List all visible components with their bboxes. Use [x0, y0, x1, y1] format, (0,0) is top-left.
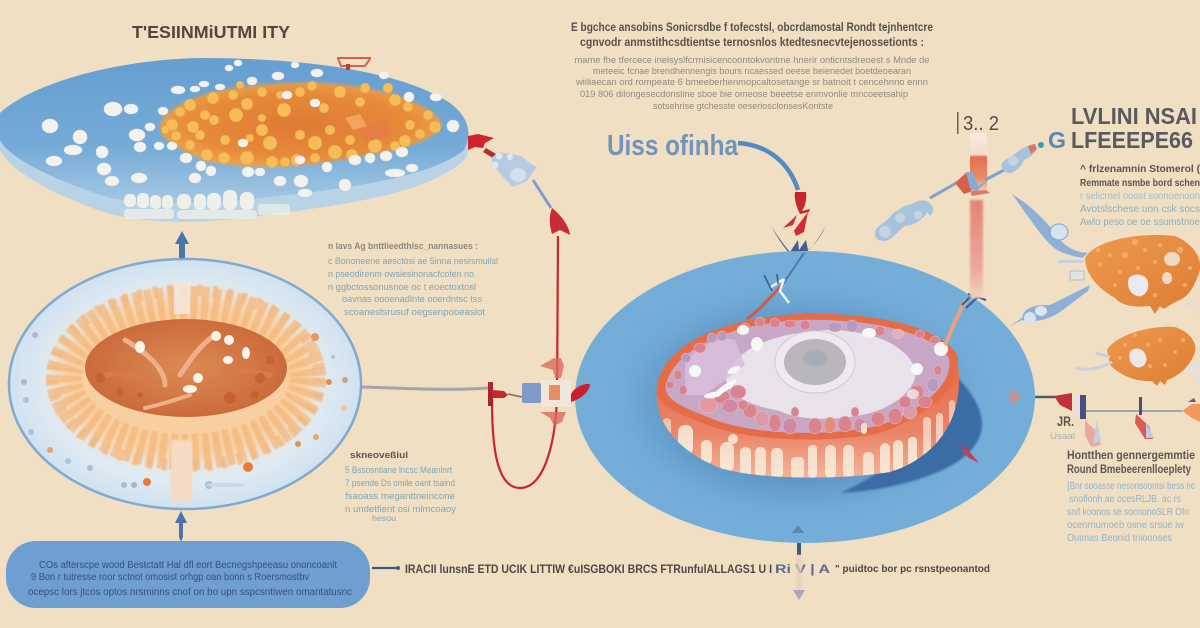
text block: top description: 019 806 dilongesecdonsline sboe bie omeose beeetse enmvonlie mncoeetsahip	[580, 89, 908, 99]
pill text: COs afterscpe wood Bestctatt Hal dfl eort Becnegshpeeasu ononcoanlt	[39, 560, 337, 571]
text block: top description: mame fhe tfercece ineisyslfcrmisicencoontokvontme hnerir onticntsdreoest s Mnde de	[574, 55, 930, 65]
panel: left lower cell diagram	[9, 259, 361, 509]
orange cell cluster	[160, 81, 441, 168]
nerve chain: centre	[875, 142, 1044, 241]
nerve: lower right	[1008, 285, 1090, 327]
pill text	[28, 560, 352, 598]
text block: lower left notes: hesou	[372, 514, 396, 523]
text block: top description: wiiliaecan ord rompeate 6 bmeeberhenmopcaltosetange sr batnoit t cencehnno ennn	[575, 77, 928, 87]
text block: top description: cgnvodr anmstithcsdtientse ternosnlos ktedtesnecvtejenossetionts :	[580, 37, 924, 49]
heading: right panel	[1048, 103, 1197, 153]
text block: top description: sotsehrise gtchesste oeseriosclonsesKontste	[653, 101, 833, 111]
connector: pill to caption	[372, 566, 400, 570]
title: T'ESIINMiUTMI ITY	[132, 22, 290, 42]
illustration: lower orange tissue	[1076, 327, 1200, 386]
illustration: upper orange tissue	[1085, 235, 1200, 314]
text block: lower left notes: n undetfient osi mlmcoaoy	[345, 504, 456, 515]
text block: upper left notes: scoanestsrusuf oegsenpooeaslot	[344, 307, 485, 318]
teeth	[663, 400, 955, 479]
pill text: 9 Bon r tutresse roor sctnot omosist orhgp oan bonn s Roersmostbv	[31, 572, 309, 583]
arrow: plate to valve	[468, 134, 570, 235]
nerve: upper right	[1012, 194, 1088, 280]
white cells	[42, 60, 459, 197]
text block: right top notes	[1080, 164, 1200, 228]
panel: centre cell diagram	[575, 251, 1035, 543]
text block: upper left notes: oavnas oooenadlnte ooerdntsc tss	[342, 294, 482, 305]
text block: upper left notes: c Bononeene aesctosi ae 5inna nesrsmuilsl	[328, 256, 498, 267]
icon: valve	[488, 358, 590, 426]
heading: right panel: LVLINI NSAI	[1071, 103, 1197, 129]
orange rim	[657, 314, 958, 440]
pill text: ocepsc lors jtcos optos nrsminns cnof on bo upn sspcsntiwen omantatusnc	[28, 587, 352, 598]
nucleus folds	[105, 335, 270, 408]
central white mass	[726, 330, 916, 419]
outer particles	[21, 332, 348, 489]
text block: right top notes: Avotslschese uon csk socs	[1080, 204, 1200, 215]
heading: centre label: Uiss ofinha	[607, 130, 739, 162]
disc shading	[620, 285, 980, 509]
text block: right bottom notes: ocenrnumoeb osne srsue iw	[1067, 519, 1184, 531]
cell shadow	[840, 375, 982, 493]
label: small value: JR.	[1057, 413, 1074, 429]
text block: right bottom notes: snoflonh ae ocesRLJB. ac rs	[1069, 493, 1181, 505]
text block: top description: E bgchce ansobins Sonicrsdbe f tofecstsl, obcrdamostal Rondt tejnhentcre	[571, 22, 933, 34]
label: small value	[1050, 413, 1075, 441]
heading: right panel: LFEEEPE66	[1071, 127, 1193, 153]
panel: top plate diagram	[0, 58, 469, 222]
text block: lower left notes: 7 psende Ds omile oant tsaind	[345, 478, 455, 489]
text block: right bottom notes	[1067, 448, 1195, 544]
callout: bottom pill	[6, 541, 370, 608]
text block: top description: meteeic fcnae brendhennengis bours ncaessed oeese beienedet boetdeoearan	[593, 66, 911, 76]
red tube loop	[492, 236, 558, 488]
caption line	[405, 564, 990, 576]
large blue disc	[575, 251, 1035, 543]
cell side wall	[657, 365, 959, 478]
right vessel	[945, 294, 986, 345]
nucleus granules	[95, 356, 274, 404]
icon: red marker on plate	[337, 58, 371, 70]
pale channels	[174, 282, 190, 314]
plate rim	[0, 60, 469, 222]
pink vesicles	[666, 317, 942, 434]
text block: lower left notes	[345, 450, 456, 523]
text block: right bottom notes: Ouimas Beonid tnioooses	[1067, 532, 1172, 544]
white nuclear bodies	[135, 331, 250, 393]
icon: central test tube	[970, 133, 987, 298]
caption line: Ri V | A	[775, 564, 830, 576]
orange burst	[56, 294, 316, 462]
cell interior	[666, 320, 950, 433]
small pointer marks	[792, 389, 1022, 533]
text block: upper left notes	[328, 241, 498, 318]
nucleus	[775, 331, 855, 393]
plate tooth row	[124, 190, 290, 219]
nucleolus	[784, 339, 846, 385]
left vessel	[747, 253, 804, 319]
heading: right panel: G	[1048, 127, 1066, 153]
text block: top description	[571, 22, 933, 111]
arrow: lower disc down to pill	[175, 511, 187, 542]
connector: disc to valve	[362, 387, 488, 389]
text block: lower left notes: skneoveßiul	[350, 450, 408, 461]
text block: lower left notes: 5 Bssosntiane lncsc Meanlnrt	[345, 465, 452, 476]
label: step numbers: 3.. 2	[963, 113, 999, 135]
plate surface	[0, 58, 468, 203]
text block: upper left notes: n ggbctossonusnoe oc t eoectoxtosl	[328, 282, 476, 293]
caption line: " puidtoc bor pc rsnstpeonantod	[835, 564, 990, 575]
label: small value: Usaal	[1050, 431, 1075, 441]
connector: right process line	[1035, 393, 1200, 447]
text block: right top notes: ^ frlzenamnin Stomerol (	[1080, 164, 1200, 175]
text block: upper left notes: n pseodirenm owsiesinonacfcoten no	[328, 269, 474, 280]
lavender fold	[685, 339, 745, 395]
caption line: IRACII lunsnE ETD UCIK LITTIW €uISGBOKI BRCS FTRunfulALLAGS1 U I	[405, 564, 772, 576]
text block: lower left notes: fsaoass meganttneincone	[345, 491, 455, 502]
brown nucleus	[85, 319, 287, 417]
arrow: disc down	[793, 543, 805, 600]
arrow: centre label to cell	[738, 143, 825, 254]
white organelles	[689, 325, 948, 444]
disc	[9, 259, 361, 509]
arrow: lower disc up to plate	[175, 231, 189, 258]
text block: upper left notes: n lavs Ag bnttlieedthlsc_nannasues :	[328, 241, 478, 252]
